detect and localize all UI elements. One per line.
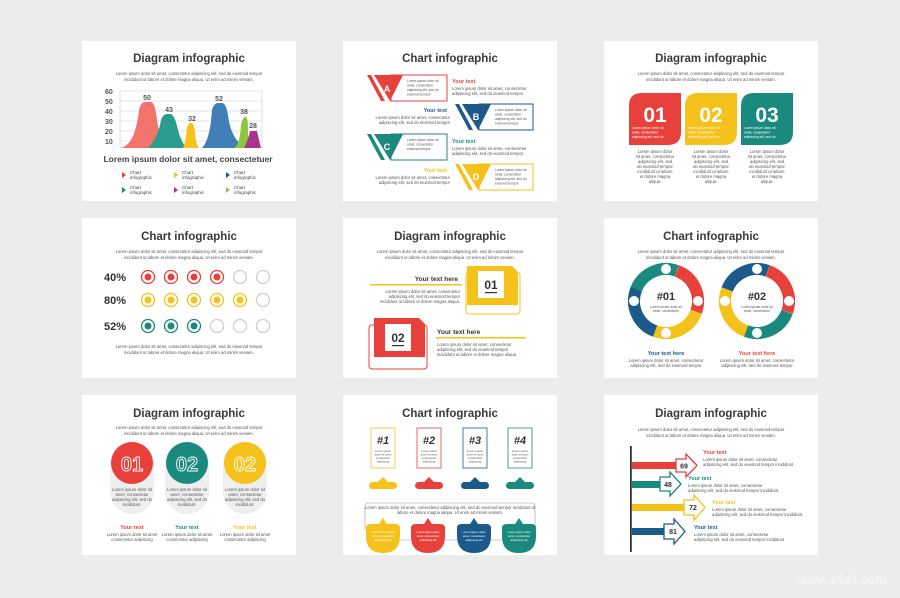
bottom box: Lorem ipsum dolor [371,530,395,534]
step boxes: Lorem ipsum [375,449,392,453]
area chart: 52 [215,96,223,103]
card 02: adipiscing elit, sed do [688,135,720,139]
captions: Lorem ipsum dolor sit amet [220,532,271,537]
captions: Lorem ipsum dolor sit amet [162,532,213,537]
item B: B [473,112,480,122]
pills [110,442,267,514]
text block: incididunt ut labore et dolore magna aliqua. Ut enim ad minim veniam. [124,77,254,82]
bottom box: amet, consectetur [372,534,394,538]
text block: Lorem ipsum dolor sit amet, consectetur adipiscing elit, sed do eiusmod tempor [116,249,263,254]
panel: ABCD slide [343,41,557,201]
card 02: 02 [699,104,723,127]
card text: adipiscing elit, sed [638,159,673,164]
text block: incididunt ut labore et dolore magna aliqua. Ut enim ad minim veniam. [646,255,776,260]
item D [376,164,533,190]
card text: Lorem ipsum dolor [694,149,729,154]
legend: infographic [182,175,205,180]
item 02: 02 [391,331,405,345]
captions: Your text [175,525,199,531]
text block [116,71,263,82]
legend: Chart [234,185,246,190]
area chart: 10 [105,139,113,146]
pills: adipiscing elit, sed do [112,497,153,502]
ring 02: Lorem ipsum dolor sit [741,305,773,309]
title: Chart infographic [402,53,499,65]
panel: arrows slide [604,395,818,555]
legend [122,170,257,195]
card text: Lorem ipsum dolor [750,149,785,154]
legend: infographic [130,175,153,180]
arrow 72: 72 [689,505,697,512]
step boxes: dolor sit amet [421,452,438,456]
item B: adipiscing elit, sed do [495,117,527,121]
card 03: adipiscing elit, sed do [744,135,776,139]
item 02 [369,318,526,369]
item 01: adipiscing elit, sed do eiusmod tempor [389,294,461,299]
item B: Lorem ipsum dolor sit amet, consectetur [376,115,451,120]
watermark: www.25xt.com [796,572,887,587]
card text: sit amet, consectetur [748,154,787,159]
card 01: adipiscing elit, sed do [632,135,664,139]
ring 02: amet, consectetur [744,309,771,313]
step boxes: dolor sit amet [512,452,529,456]
bottom box: adipiscing elit [375,538,392,542]
text block [116,249,263,260]
title: Chart infographic [141,231,238,243]
text block: Lorem ipsum dolor sit amet, consectetur adipiscing elit, sed do eiusmod tempor [116,71,263,76]
pills: Lorem ipsum dolor sit [112,487,153,492]
item B: Your text [424,108,447,114]
item D: amet, consectetur [495,172,522,176]
bottom box: adipiscing elit [420,538,437,542]
panel: 01 02 03 cards [604,41,818,201]
step boxes: adipiscing [377,460,390,464]
captions: consectetur adipiscing [111,537,153,542]
text block: incididunt ut labore et dolore magna aliqua. Ut enim ad minim veniam. [124,255,254,260]
card 01: amet, consectetur [632,130,659,134]
step boxes: consectetur [468,456,482,460]
text block: incididunt ut labore et dolore magna aliqua. Ut enim ad minim veniam. [385,255,515,260]
area chart: 32 [188,116,196,123]
step boxes [371,428,532,468]
arrow 69: 69 [680,464,688,470]
item D: adipiscing elit, sed do [495,177,527,181]
arrow 81: Your text [694,525,718,531]
captions: consectetur adipiscing [166,537,208,542]
card text: aliqua. [649,179,661,184]
bottom box: amet, consectetur [463,534,485,538]
bottom box: amet, consectetur [417,534,439,538]
step boxes: adipiscing [423,460,436,464]
pills: amet, consectetur [170,492,204,497]
item 01: 01 [484,278,498,292]
pills: adipiscing elit, sed do [167,497,208,502]
arrow 48: Your text [688,476,712,482]
area chart [105,89,262,148]
arrow 69 [632,450,794,477]
legend: Chart [182,185,194,190]
ring 01 [625,260,707,342]
title: Diagram infographic [133,408,246,420]
panel: diagram chart slide [82,41,296,201]
bottom box: Lorem ipsum dolor [507,530,531,534]
card 02 [685,93,737,145]
area chart: 50 [143,95,151,102]
bottom box: adipiscing elit [466,538,483,542]
arrow 72: adipiscing elit, sed do eiusmod tempor incididunt [712,512,803,517]
panel: #1-#4 steps [343,395,557,555]
step boxes: dolor sit amet [375,452,392,456]
pills: 02 [176,454,198,476]
item C [367,134,527,160]
card 02: amet, consectetur [688,130,715,134]
text block [116,425,263,436]
title: Diagram infographic [655,53,768,65]
legend: Chart [182,170,194,175]
card text [636,149,787,184]
pills: incididunt. [236,502,254,507]
panel: percentage dots [82,218,296,378]
card text: incididunt ut labore [693,169,729,174]
text block [638,427,785,438]
card text: adipiscing elit, sed [750,159,785,164]
legend: infographic [234,190,257,195]
ring captions: Your text here [739,351,775,357]
area chart: 28 [249,123,257,130]
pills: Lorem ipsum dolor sit [225,487,266,492]
dot rows: 80% [104,295,126,307]
item D: adipiscing elit, sed do eiusmod tempor [379,180,451,185]
item 02: Your text here [437,329,481,336]
ring 01: #01 [657,291,675,303]
bottom text: incididunt ut labore et dolore magna aliqua. Ut enim ad minim veniam. [124,350,254,355]
panel: circle pills [82,395,296,555]
card text: aliqua. [761,179,773,184]
card text: do eiusmod tempor [637,164,674,169]
pills: 01 [121,454,143,476]
item A: adipiscing elit, sed do [407,88,439,92]
card 03: 03 [755,104,779,127]
area chart: 40 [105,109,113,116]
step boxes: adipiscing [514,460,527,464]
item 01 [370,266,520,314]
step boxes: Lorem ipsum [512,449,529,453]
card 01: 01 [643,104,667,127]
pills: amet, consectetur [115,492,149,497]
step boxes: #3 [469,435,481,447]
card text: et dolore magna [640,174,671,179]
arrow 69: Lorem ipsum dolor sit amet, consectetur [703,457,778,462]
item D: Lorem ipsum dolor sit amet, consectetur [376,175,451,180]
area chart: 60 [105,89,113,96]
text block [638,249,785,260]
legend: Chart [130,185,142,190]
item 01: Lorem ipsum dolor sit amet, consectetur [386,289,461,294]
item D: eiusmod tempor [495,182,520,186]
pills: incididunt. [178,502,196,507]
card 03 [741,93,793,145]
item A: Lorem ipsum dolor sit [407,79,439,83]
pills: 02 [234,454,256,476]
item 02: incididunt ut labore et dolore magna aliqua. [437,352,517,357]
bottom box: amet, consectetur [508,534,530,538]
step boxes: dolor sit amet [467,452,484,456]
text block: incididunt ut labore et dolore magna aliqua. Ut enim ad minim veniam. [124,431,254,436]
item 02: Lorem ipsum dolor sit amet, consectetur [437,342,512,347]
arrow 48: adipiscing elit, sed do eiusmod tempor incididunt [688,488,779,493]
item C: eiusmod tempor [407,147,432,151]
captions: Your text [233,525,257,531]
text block: Lorem ipsum dolor sit amet, consectetur adipiscing elit, sed do eiusmod tempor [638,249,785,254]
item 01: Your text here [415,276,458,283]
area chart: 50 [105,99,113,106]
step boxes: #4 [514,435,526,447]
legend: Chart [130,170,142,175]
panel: 01 02 folders [343,218,557,378]
card text: incididunt ut labore [749,169,785,174]
dot rows [104,270,270,333]
card 03: Lorem ipsum dolor sit [744,126,776,130]
card text: Lorem ipsum dolor [638,149,673,154]
arrow 69: Your text [703,450,727,456]
area chart: 38 [240,109,248,116]
text block: incididunt ut labore et dolore magna aliqua. Ut enim ad minim veniam. [646,77,776,82]
text block: Lorem ipsum dolor sit amet, consectetur adipiscing elit, sed do eiusmod tempor [638,427,785,432]
text block: Lorem ipsum dolor sit amet, consectetur adipiscing elit, sed do eiusmod tempor [377,249,524,254]
item B: eiusmod tempor [495,122,520,126]
legend: infographic [234,175,257,180]
pills: Lorem ipsum dolor sit [167,487,208,492]
pills: incididunt. [123,502,141,507]
bottom box: Lorem ipsum dolor [416,530,440,534]
card text: do eiusmod tempor [749,164,786,169]
bottom box: Lorem ipsum dolor sit amet, consectetur adipiscing elit, sed do eiusmod tempor incididunt ut [365,505,536,510]
captions [107,525,271,542]
card 02: Lorem ipsum dolor sit [688,126,720,130]
item A: eiusmod tempor [407,92,432,96]
dot rows: 40% [104,272,126,284]
item D: Lorem ipsum dolor sit [495,168,527,172]
item A: adipiscing elit, sed do eiusmod tempor [452,91,524,96]
card text: et dolore magna [696,174,727,179]
bottom box [365,503,536,553]
area chart: 30 [105,119,113,126]
item D: D [473,172,480,182]
card text: adipiscing elit, sed [694,159,729,164]
text block [377,249,524,260]
bottom box: Lorem ipsum dolor [462,530,486,534]
item C: Lorem ipsum dolor sit [407,138,439,142]
step boxes: adipiscing [469,460,482,464]
item C: adipiscing elit, sed do eiusmod tempor [452,151,524,156]
item A: A [384,84,391,94]
item C: Your text [452,139,476,145]
arrow 72: Lorem ipsum dolor sit amet, consectetur [712,507,787,512]
text block: incididunt ut labore et dolore magna aliqua. Ut enim ad minim veniam. [646,433,776,438]
bottom text [116,344,263,355]
title: Diagram infographic [655,408,768,420]
card text: incididunt ut labore [637,169,673,174]
ring 01: amet, consectetur [653,309,680,313]
step boxes: consectetur [513,456,527,460]
bottom box: adipiscing elit [511,538,528,542]
item B: adipiscing elit, sed do eiusmod tempor [379,120,451,125]
title: Chart infographic [663,231,760,243]
ring captions: adipiscing elit, sed do eiusmod tempor [721,363,793,368]
ring 01: Lorem ipsum dolor sit [650,305,682,309]
item B: Lorem ipsum dolor sit [495,108,527,112]
card text: aliqua. [705,179,717,184]
panel: ring charts [604,218,818,378]
card 03: amet, consectetur [744,130,771,134]
vertical bar [630,446,632,552]
step boxes: #1 [377,435,389,447]
captions: Your text [120,525,144,531]
legend: infographic [130,190,153,195]
card text: et dolore magna [752,174,783,179]
arrow 81: 81 [669,529,677,536]
arrow 81: adipiscing elit, sed do eiusmod tempor incididunt [694,537,785,542]
title: Diagram infographic [394,231,507,243]
pills: adipiscing elit, sed do [225,497,266,502]
text block: Lorem ipsum dolor sit amet, consectetur adipiscing elit, sed do eiusmod tempor [638,71,785,76]
title: Chart infographic [402,408,499,420]
step boxes: #2 [423,435,435,447]
ring captions: Your text here [648,351,684,357]
text block [638,71,785,82]
dot rows: 52% [104,321,126,333]
ring 02: #02 [748,291,766,303]
arrow 48 [632,472,779,496]
item A: Your text [452,79,476,85]
captions: consectetur adipiscing [224,537,266,542]
item A: amet, consectetur [407,84,434,88]
ring 02 [716,260,798,342]
bottom text: Lorem ipsum dolor sit amet, consectetur adipiscing elit, sed do eiusmod tempor [116,344,263,349]
step boxes: consectetur [376,456,390,460]
ring captions: Lorem ipsum dolor sit amet, consectetur [720,358,795,363]
item 02: adipiscing elit, sed do eiusmod tempor [437,347,509,352]
ring captions [629,351,795,368]
item B: amet, consectetur [495,112,522,116]
card 01: Lorem ipsum dolor sit [632,126,664,130]
item C: Lorem ipsum dolor sit amet, consectetur [452,146,527,151]
item C: C [384,142,391,152]
item 01: incididunt ut labore et dolore magna aliqua. [380,299,460,304]
step boxes: consectetur [422,456,436,460]
item C: amet, consectetur [407,142,434,146]
card text: do eiusmod tempor [693,164,730,169]
arrow 72 [632,495,803,520]
card text: sit amet, consectetur [692,154,731,159]
item B [376,104,533,130]
text block: Lorem ipsum dolor sit amet, consectetur adipiscing elit, sed do eiusmod tempor [116,425,263,430]
arrow 48: 48 [664,482,672,489]
item A [367,75,527,101]
bottom box: labore et dolore magna aliqua. Ut enim ad minim veniam. [397,510,503,515]
area chart: 20 [105,129,113,136]
card text: sit amet, consectetur [636,154,675,159]
markers [369,477,534,489]
item A: Lorem ipsum dolor sit amet, consectetur [452,86,527,91]
card 01 [629,93,681,145]
step boxes: Lorem ipsum [467,449,484,453]
subtitle: Lorem ipsum dolor sit amet, consectetuer [103,154,273,164]
area chart: 43 [165,107,173,114]
arrow 81 [632,519,785,544]
title: Diagram infographic [133,53,246,65]
ring captions: Lorem ipsum dolor sit amet, consectetur [629,358,704,363]
arrow 48: Lorem ipsum dolor sit amet, consectetur [688,483,763,488]
arrow 72: Your text [712,500,736,506]
arrow 81: Lorem ipsum dolor sit amet, consectetur [694,532,769,537]
pills: amet, consectetur [228,492,262,497]
legend: infographic [182,190,205,195]
arrow 69: adipiscing elit, sed do eiusmod tempor incididunt [703,462,794,467]
step boxes: Lorem ipsum [421,449,438,453]
ring captions: adipiscing elit, sed do eiusmod tempor [630,363,702,368]
legend: Chart [234,170,246,175]
item D: Your text [424,168,447,174]
captions: Lorem ipsum dolor sit amet [107,532,158,537]
